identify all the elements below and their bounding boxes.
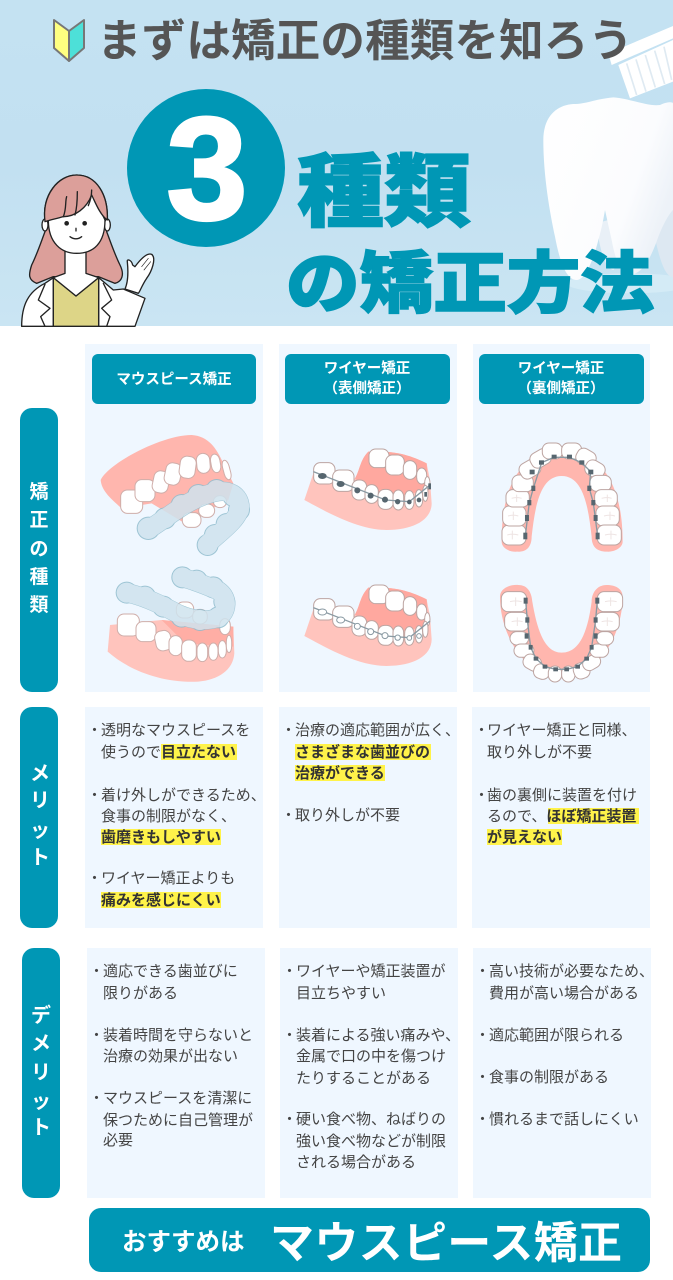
lower arch (500, 585, 623, 682)
merits: wire front: 治療の適応範囲が広く、 (295, 721, 460, 739)
merits: mouthpiece: 痛みを感じにくい (101, 891, 221, 909)
recommendation banner: マウスピース矯正 (270, 1219, 622, 1268)
demerits: wire back: 慣れるまで話しにくい (489, 1110, 639, 1128)
merits: wire back (474, 721, 639, 846)
demerits: wire front: ワイヤーや矯正装置が (296, 962, 446, 980)
lower aligner (116, 566, 235, 631)
demerits: mouthpiece: 装着時間を守らないと (103, 1027, 253, 1044)
beginner mark icon (54, 20, 84, 61)
demerits: wire front: 強い食べ物などが制限 (296, 1133, 446, 1150)
panel: column backgrounds (85, 344, 651, 1198)
row label: demerits (22, 948, 60, 1198)
main title line 1: 種類 (297, 148, 471, 237)
demerits: wire front: 装着による強い痛みや、 (296, 1027, 460, 1044)
column header: mouthpiece: マウスピース矯正 (116, 371, 232, 388)
number badge (127, 87, 285, 250)
row label: demerits: デ (31, 1003, 51, 1027)
demerits: wire back: 費用が高い場合がある (489, 985, 639, 1002)
row label: types: 種 (29, 566, 49, 588)
merits: wire back: ワイヤー矯正と同様、 (487, 721, 637, 739)
merits: wire back: るので、ほぼ矯正装置 (487, 808, 636, 825)
demerits: mouthpiece: 保つために自己管理が (103, 1111, 253, 1129)
upper jaw (101, 435, 233, 527)
hero header (0, 0, 673, 326)
demerits: wire back: ・ (475, 1069, 490, 1086)
row label: demerits: メ (31, 1033, 51, 1055)
merits: wire front: 取り外しが不要 (295, 807, 400, 824)
merits: mouthpiece (87, 722, 266, 909)
demerits: mouthpiece: ・ (89, 963, 104, 980)
demerits: wire front: 硬い食べ物、ねばりの (296, 1111, 446, 1128)
demerits: wire front: ・ (282, 1111, 297, 1128)
merits: mouthpiece: ・ (87, 787, 102, 804)
column header: wire front: （表側矯正） (324, 379, 410, 397)
merits: mouthpiece: 食事の制限がなく、 (101, 808, 236, 825)
demerits: wire back: 食事の制限がある (489, 1069, 609, 1086)
upper aligner (137, 479, 250, 556)
merits: mouthpiece: 透明なマウスピースを (101, 722, 250, 739)
merits: wire back: ・ (474, 722, 489, 739)
upper jaw with metal brackets (304, 449, 432, 530)
subtitle: まずは矯正の種類を知ろう (97, 17, 633, 66)
merits: mouthpiece: 歯磨きもしやすい (101, 828, 221, 846)
woman illustration (22, 175, 154, 326)
merits: wire back: が見えない (487, 828, 562, 846)
illustration: front braces (304, 449, 432, 666)
demerits: wire back: ・ (475, 1027, 490, 1044)
merits: wire back: 歯の裏側に装置を付け (487, 787, 637, 804)
column header: wire back: ワイヤー矯正 (518, 360, 604, 377)
merits: wire front: ・ (281, 722, 296, 739)
column header: wire front: ワイヤー矯正 (324, 360, 410, 377)
demerits: wire front: 金属で口の中を傷つけ (296, 1048, 446, 1065)
toothbrush (608, 26, 673, 98)
column header: wire front (285, 354, 450, 404)
demerits: wire front: される場合がある (296, 1154, 416, 1171)
merits: wire front: 治療ができる (295, 764, 385, 782)
demerits: mouthpiece: ・ (89, 1090, 104, 1107)
lower jaw with clear brackets (304, 585, 432, 666)
row label: merits: リ (30, 790, 50, 812)
demerits: wire front: ・ (282, 963, 297, 980)
demerits: wire front: たりすることがある (296, 1070, 431, 1087)
recommendation banner: おすすめは (122, 1229, 244, 1256)
merits: mouthpiece: 使うので目立たない (101, 744, 236, 761)
row label: merits: ッ (30, 820, 50, 842)
row label: demerits: ト (31, 1117, 51, 1139)
row label: merits (20, 707, 58, 928)
merits: wire back: 取り外しが不要 (487, 744, 592, 761)
upper arch (502, 443, 623, 552)
merits: wire front: ・ (281, 807, 296, 824)
demerits: wire back (475, 963, 654, 1128)
lower jaw (108, 602, 234, 682)
recommendation banner (89, 1208, 650, 1272)
row label: types: 類 (29, 594, 49, 616)
demerits: mouthpiece: 必要 (103, 1132, 133, 1149)
demerits: mouthpiece: 治療の効果が出ない (103, 1048, 238, 1065)
row label: types: 正 (29, 510, 49, 531)
merits: mouthpiece: ・ (87, 870, 102, 887)
merits: mouthpiece: 着け外しができるため、 (101, 787, 266, 804)
row label: merits: ト (30, 847, 50, 869)
column header: mouthpiece (92, 354, 256, 404)
merits: mouthpiece: ・ (87, 722, 102, 739)
column header: wire back: （裏側矯正） (518, 379, 604, 397)
demerits: mouthpiece (89, 963, 253, 1149)
illustration: mouthpiece (101, 435, 250, 682)
demerits: wire front (282, 962, 460, 1171)
demerits: wire front: ・ (282, 1027, 297, 1044)
number badge: 3 (166, 87, 248, 250)
row label: types: 矯 (29, 481, 49, 503)
demerits: wire front: 目立ちやすい (296, 985, 386, 1002)
row label: types (20, 408, 58, 692)
merits: wire front (281, 721, 460, 824)
row label: merits: メ (30, 763, 50, 785)
demerits: mouthpiece: 限りがある (103, 985, 178, 1002)
merits: mouthpiece: ワイヤー矯正よりも (101, 869, 235, 887)
merits: wire front: さまざまな歯並びの (295, 743, 430, 761)
main title line 2: の矯正方法 (286, 247, 654, 322)
demerits: mouthpiece: マウスピースを清潔に (103, 1090, 252, 1107)
demerits: wire back: 適応範囲が限られる (489, 1026, 624, 1044)
demerits: wire back: ・ (475, 1111, 490, 1128)
illustration: lingual braces (500, 443, 623, 682)
demerits: wire back: ・ (475, 963, 490, 980)
demerits: mouthpiece: ・ (89, 1027, 104, 1044)
tooth photo (543, 97, 673, 293)
demerits: wire back: 高い技術が必要なため、 (489, 963, 654, 980)
row label: types: の (29, 539, 49, 560)
row label: demerits: リ (31, 1062, 51, 1084)
row label: demerits: ッ (31, 1091, 51, 1113)
column header: wire back (479, 354, 644, 404)
demerits: mouthpiece: 適応できる歯並びに (103, 963, 238, 980)
merits: wire back: ・ (474, 787, 489, 804)
